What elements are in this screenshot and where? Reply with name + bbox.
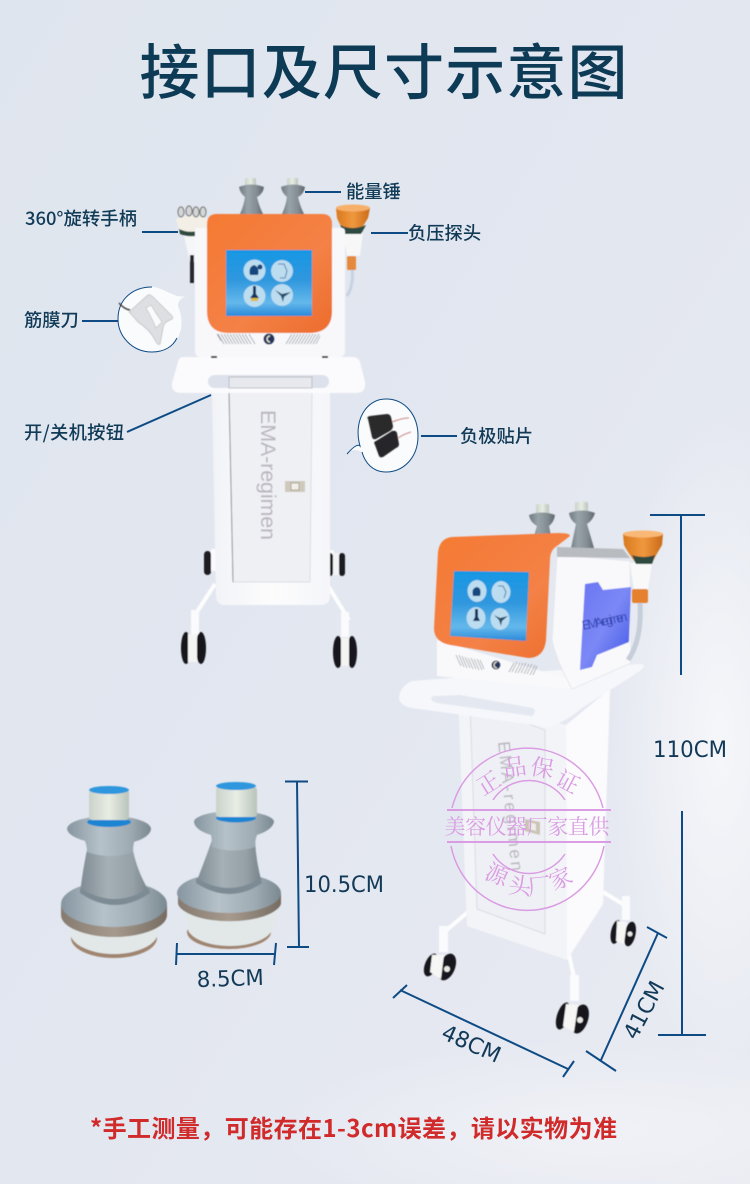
power switch <box>285 481 305 492</box>
label: negative electrode pad <box>421 422 533 448</box>
touch screen <box>226 250 312 316</box>
icon: electrode pads <box>367 414 411 457</box>
screen icon a <box>468 580 486 602</box>
callout: fascia knife <box>118 287 190 352</box>
dimension: height <box>650 515 727 1035</box>
logo button <box>264 334 274 344</box>
speaker vents <box>217 334 320 344</box>
dimension: depth: 41CM <box>619 977 670 1044</box>
screen icon 4 <box>271 284 293 306</box>
dimension: width: 48CM <box>438 1021 504 1069</box>
logo button angled <box>492 660 500 670</box>
dimension: depth <box>586 927 670 1071</box>
label: power button: 开/关机按钮 <box>24 419 124 445</box>
stamp bottom text: 厂 <box>526 867 552 902</box>
icon: fascia knife tool <box>119 295 173 344</box>
dimension: height: 110CM <box>653 738 727 763</box>
angled view machine on trolley <box>399 502 663 1036</box>
label: negative pressure probe: 负压探头 <box>408 220 481 246</box>
watermark stamp <box>444 748 611 910</box>
stamp top text: 证 <box>551 761 586 801</box>
label: energy hammer <box>305 178 401 204</box>
machine body angled <box>437 547 631 689</box>
dimension: width <box>393 985 574 1077</box>
label: power button <box>24 395 211 445</box>
stamp bottom text: 头 <box>507 867 534 902</box>
screen icon d <box>490 608 510 630</box>
stamp top text: 品 <box>501 748 528 784</box>
footnote: *手工测量，可能存在1-3cm误差，请以实物为准 <box>90 1109 617 1144</box>
label: 360 rotating handle: 360°旋转手柄 <box>25 205 137 231</box>
dimension: hammer height: 10.5CM <box>304 873 384 898</box>
window label: EMA-regimen <box>581 609 629 633</box>
label: negative pressure probe <box>371 220 481 246</box>
energy hammer photo left <box>61 786 167 958</box>
title: 接口及尺寸示意图 <box>140 25 628 112</box>
stamp bottom text: 家 <box>543 858 577 897</box>
trolley legs <box>442 892 626 982</box>
screen icon c <box>466 607 486 629</box>
screen icon 1 <box>244 260 266 282</box>
stamp top text: 正 <box>469 762 506 802</box>
trolley column <box>212 392 330 605</box>
product label on angled column: EMA-regimen <box>494 740 527 872</box>
stamp centre text: 美容仪器厂家直供 <box>444 811 610 841</box>
hammers angled <box>529 502 595 548</box>
orange panel angled <box>434 533 570 658</box>
icon: negative pressure probe <box>336 204 370 296</box>
power switch angled <box>525 819 540 835</box>
product label on column: EMA-regimen <box>256 410 280 540</box>
icon: 360 rotating handle <box>176 206 208 262</box>
front view machine on trolley <box>172 178 370 668</box>
orange front panel <box>207 214 332 333</box>
dimension: hammer width: 8.5CM <box>196 966 264 993</box>
label: energy hammer: 能量锤 <box>346 178 401 204</box>
dimension: hammer width <box>176 943 276 993</box>
shelf angled <box>399 664 644 727</box>
energy hammer photo right <box>177 782 281 949</box>
label: fascia knife <box>24 306 118 332</box>
blue light window <box>580 582 631 670</box>
stamp top text: 保 <box>528 748 557 785</box>
screen icon 3 <box>244 285 266 307</box>
angled casters <box>421 896 638 1036</box>
icon: energy hammer left <box>239 178 264 214</box>
screen icon b <box>492 581 510 603</box>
label: negative electrode pad: 负极贴片 <box>460 422 533 448</box>
screen icon 2 <box>271 260 293 282</box>
stamp bottom text <box>481 854 577 902</box>
trolley column angled <box>458 689 610 960</box>
stamp top text <box>469 748 586 802</box>
callout: negative electrode pad <box>347 399 418 472</box>
negative pressure probe angled <box>623 530 663 660</box>
trolley shelf <box>172 357 365 393</box>
icon: energy hammer right <box>281 178 305 214</box>
icon: side casters and legs <box>181 549 357 668</box>
machine body <box>190 228 345 358</box>
label: fascia knife: 筋膜刀 <box>24 306 79 332</box>
stamp bottom text: 源 <box>481 854 515 893</box>
touch screen angled <box>450 571 529 641</box>
dimension: hammer height <box>285 782 384 947</box>
speaker vents angled <box>456 655 537 675</box>
